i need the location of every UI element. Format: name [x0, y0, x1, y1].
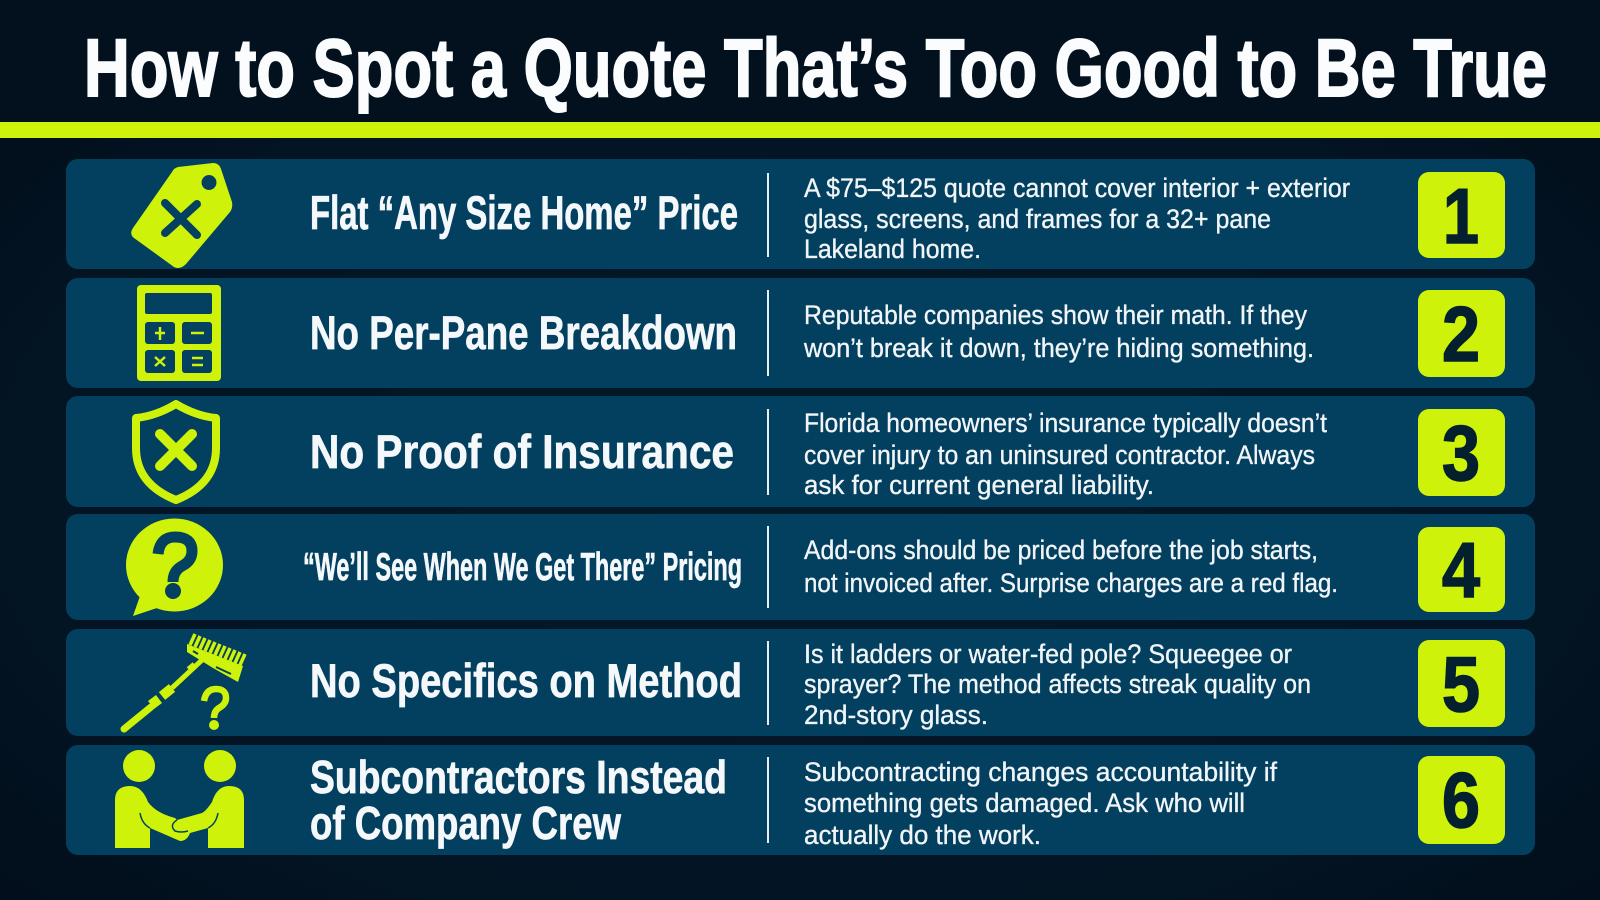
description: Add-ons should be priced before the job starts, — [804, 535, 1318, 565]
heading: Flat “Any Size Home” Price — [310, 186, 738, 239]
panel: row 2 per-pane — [66, 278, 1535, 388]
heading: No Specifics on Method — [310, 654, 742, 707]
number badge — [1418, 756, 1505, 844]
number badge — [1418, 640, 1505, 728]
number badge — [1418, 172, 1505, 260]
heading: Subcontractors Instead — [310, 751, 727, 803]
icon: price tag with x — [131, 163, 232, 268]
description: Lakeland home. — [804, 234, 981, 264]
number badge: 2 — [1442, 290, 1480, 378]
description: A $75–$125 quote cannot cover interior + exterior — [804, 173, 1350, 203]
icon: two people shaking hands — [115, 750, 244, 848]
description: actually do the work. — [804, 820, 1041, 850]
description: 2nd-story glass. — [804, 700, 988, 730]
description: not invoiced after. Surprise charges are a red flag. — [804, 568, 1338, 598]
number badge — [1418, 409, 1505, 497]
description: ask for current general liability. — [804, 470, 1154, 500]
icon: shield with x — [136, 404, 216, 500]
heading: “We’ll See When We Get There” Pricing — [303, 546, 742, 589]
number badge: 6 — [1442, 756, 1480, 844]
description — [804, 408, 1328, 500]
panel: row 4 surprise pricing — [66, 514, 1535, 620]
description — [804, 535, 1338, 598]
icon: calculator — [137, 285, 221, 381]
heading: of Company Crew — [310, 797, 621, 849]
description: Is it ladders or water-fed pole? Squeegee or — [804, 639, 1292, 669]
description — [804, 757, 1278, 850]
panel: row 1 flat price — [66, 159, 1535, 269]
description — [803, 300, 1314, 363]
heading — [310, 751, 727, 849]
description: glass, screens, and frames for a 32+ pane — [804, 204, 1271, 234]
icon: pole brush with question mark — [124, 634, 245, 730]
description — [804, 639, 1311, 730]
heading: No Per-Pane Breakdown — [310, 306, 737, 359]
number badge: 3 — [1442, 409, 1480, 497]
description — [804, 173, 1350, 264]
number badge — [1418, 290, 1505, 378]
description: cover injury to an uninsured contractor. Always — [804, 440, 1315, 470]
description: something gets damaged. Ask who will — [804, 788, 1245, 818]
panel: row 5 method — [66, 629, 1535, 736]
description: Subcontracting changes accountability if — [804, 757, 1278, 787]
description: sprayer? The method affects streak quality on — [804, 669, 1311, 699]
number badge: 1 — [1443, 172, 1479, 260]
number badge: 4 — [1442, 526, 1480, 614]
panel: row 6 subcontractors — [66, 745, 1535, 855]
description: Florida homeowners’ insurance typically doesn’t — [804, 408, 1328, 438]
panel: row 3 insurance — [66, 396, 1535, 507]
accent bar — [0, 122, 1600, 138]
heading: No Proof of Insurance — [310, 425, 734, 478]
description: won’t break it down, they’re hiding something. — [803, 333, 1314, 363]
icon: question bubble — [126, 518, 223, 616]
number badge: 5 — [1442, 640, 1480, 728]
number badge — [1418, 526, 1505, 614]
description: Reputable companies show their math. If they — [804, 300, 1308, 330]
